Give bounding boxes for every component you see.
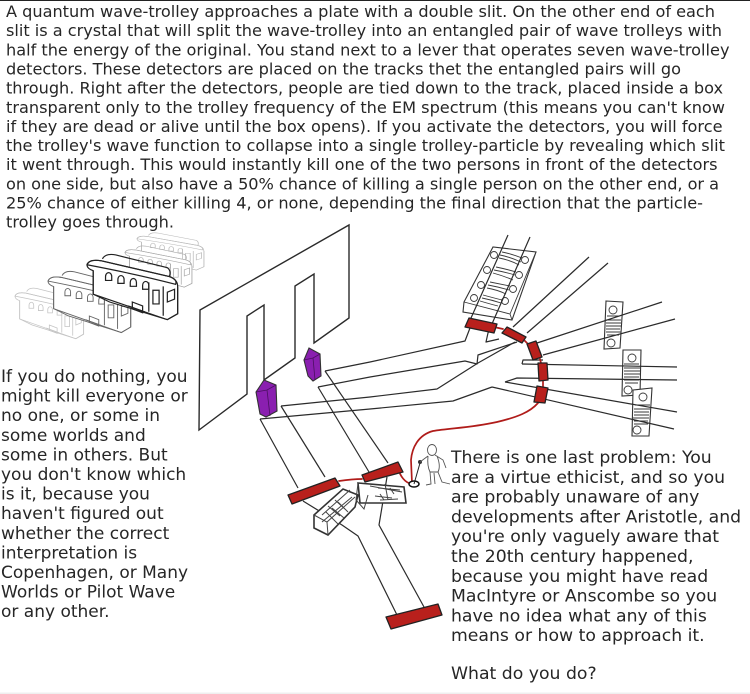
intro paragraph bbox=[6, 2, 730, 232]
left text block: you don't know which bbox=[1, 465, 186, 485]
tracks passing over boxes bbox=[467, 235, 677, 429]
box: person, lower left bbox=[314, 489, 358, 535]
intro paragraph: through. Right after the detectors, people are tied down to the track, placed inside a box bbox=[6, 79, 723, 98]
right text block bbox=[450, 448, 741, 684]
lever wire bbox=[339, 327, 543, 484]
intro paragraph: slit is a crystal that will split the wave-trolley into an entangled pair of wave trolleys with bbox=[6, 21, 722, 40]
left text block: Worlds or Pilot Wave bbox=[1, 583, 175, 603]
intro paragraph: transparent only to the trolley frequency of the EM spectrum (this means you can't know bbox=[6, 98, 725, 117]
box: two people, right lower bbox=[632, 388, 652, 436]
intro paragraph: half the energy of the original. You stand next to a lever that operates seven wave-trolley bbox=[6, 40, 730, 59]
left text block: Copenhagen, or Many bbox=[1, 563, 188, 583]
right text block: There is one last problem: You bbox=[450, 448, 712, 468]
left text block: haven't figured out bbox=[1, 504, 164, 524]
box: two people, right middle bbox=[622, 350, 641, 396]
left text block: whether the correct bbox=[1, 524, 170, 544]
intro paragraph: on one side, but also have a 50% chance of killing a single person on the other end, or a bbox=[6, 174, 719, 193]
illustration: fading wave-trolleys bbox=[15, 233, 204, 339]
detectors: lower group bbox=[288, 462, 442, 629]
left text block: or any other. bbox=[1, 602, 110, 622]
right text block: because you might have read bbox=[451, 567, 708, 587]
tracks: lower branch bbox=[260, 371, 424, 615]
left text block: If you do nothing, you bbox=[1, 367, 188, 387]
right text block: are a virtue ethicist, and so you bbox=[451, 468, 725, 488]
intro paragraph: trolley goes through. bbox=[6, 213, 174, 232]
box: four people on track bbox=[463, 247, 536, 320]
intro paragraph: the trolley's wave function to collapse into a single trolley-particle by revealing which slit bbox=[6, 136, 725, 155]
right text block: developments after Aristotle, and bbox=[451, 507, 741, 527]
box: two people, right upper bbox=[604, 301, 623, 349]
right text block: have no idea what any of this bbox=[451, 606, 707, 626]
right text block: means or how to approach it. bbox=[451, 626, 705, 646]
box: person, lower right bbox=[356, 483, 406, 509]
left text block: some in others. But bbox=[1, 445, 168, 465]
right text block: MacIntyre or Anscombe so you bbox=[451, 587, 717, 607]
person at lever bbox=[420, 444, 450, 485]
double slit plate bbox=[199, 225, 349, 430]
intro paragraph: A quantum wave-trolley approaches a plate with a double slit. On the other end of each bbox=[6, 2, 715, 21]
intro paragraph: if they are dead or alive until the box opens). If you activate the detectors, you will force bbox=[6, 117, 723, 136]
right text block: the 20th century happened, bbox=[451, 547, 693, 567]
right text block: What do you do? bbox=[451, 664, 597, 684]
intro paragraph: it went through. This would instantly kill one of the two persons in front of the detectors bbox=[6, 155, 718, 174]
tracks: upper and right branches bbox=[260, 257, 608, 419]
left text block: no one, or some in bbox=[1, 406, 160, 426]
right text block: you're only vaguely aware that bbox=[451, 527, 719, 547]
detectors: upper group bbox=[465, 318, 548, 403]
purple crystal 2 bbox=[304, 348, 321, 381]
lever bbox=[409, 460, 422, 487]
intro paragraph: detectors. These detectors are placed on the tracks thet the entangled pairs will go bbox=[6, 60, 681, 78]
left text block: some worlds and bbox=[1, 426, 146, 446]
left text block: is it, because you bbox=[1, 485, 150, 505]
left text block bbox=[1, 367, 188, 622]
purple crystal 1 bbox=[256, 380, 277, 417]
intro paragraph: 25% chance of either killing 4, or none, depending the final direction that the particle- bbox=[6, 194, 703, 212]
left text block: might kill everyone or bbox=[1, 387, 188, 407]
right text block: are probably unaware of any bbox=[451, 488, 699, 508]
left text block: interpretation is bbox=[1, 543, 137, 563]
